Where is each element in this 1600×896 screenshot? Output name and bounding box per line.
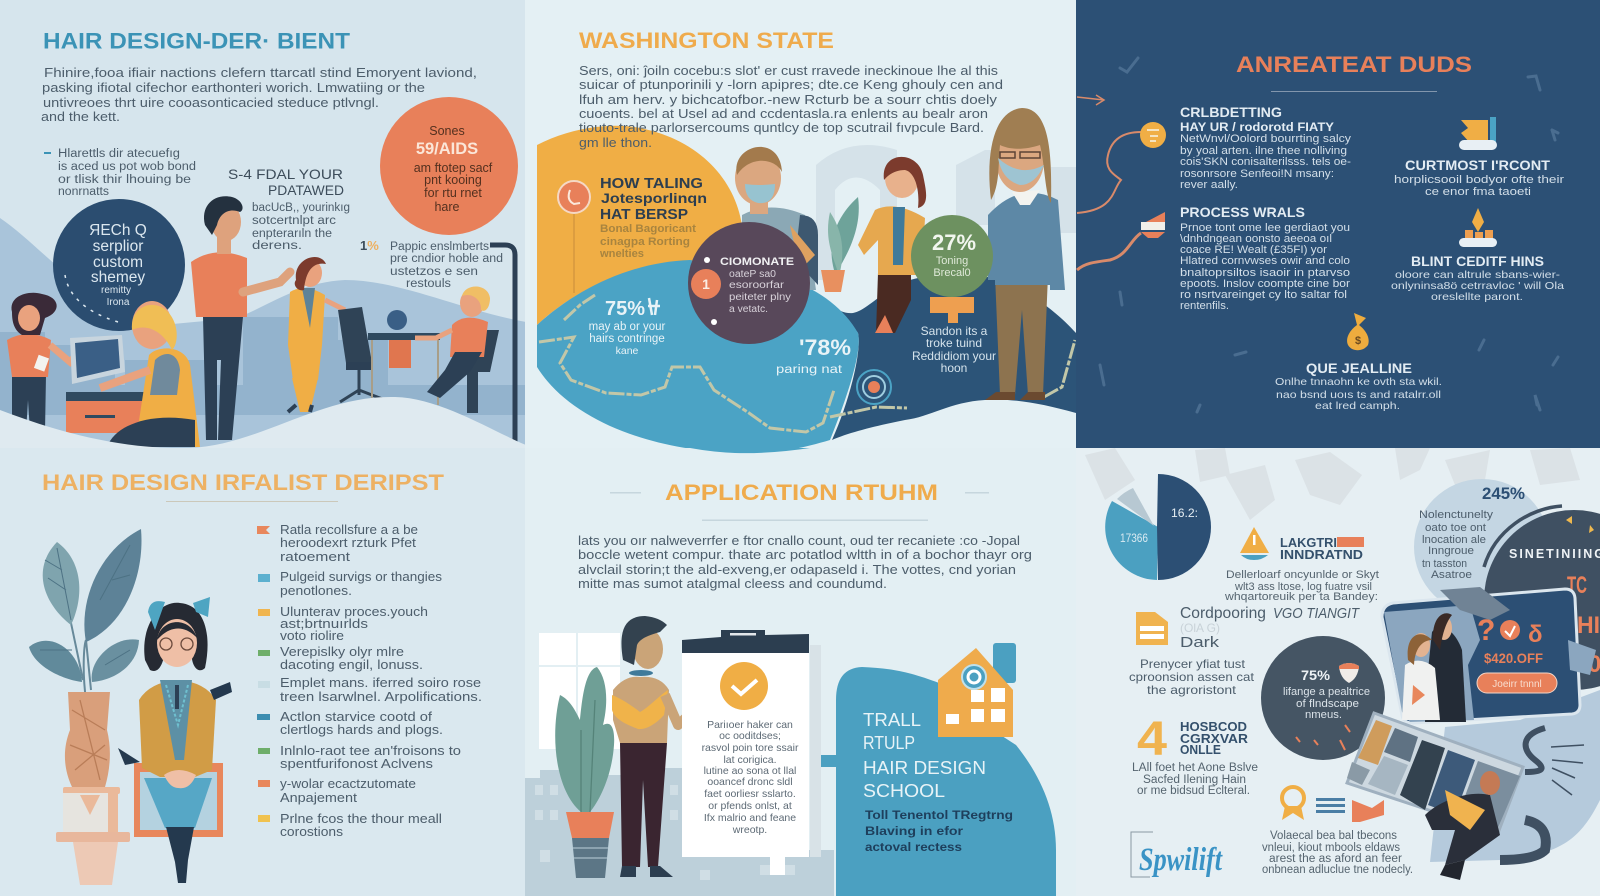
list item 4	[258, 645, 423, 672]
illustration: tall stylist	[191, 196, 290, 440]
text block: cordpooring	[1129, 605, 1361, 697]
text block: cordpooring: (OlA G)	[1180, 621, 1220, 635]
text block: curtmost: ce enor fma taoeti	[1425, 186, 1531, 198]
list item 8	[258, 777, 416, 805]
clipboard with text: Ifx malrio and feane	[704, 812, 796, 824]
icon: award ribbon	[1282, 787, 1304, 820]
illustration: tall person	[985, 108, 1065, 400]
list item 7: Inlnlo-raot tee an'froisons to	[280, 744, 461, 758]
text block: closing note: onbnean adluclue tne nodecly.	[1262, 864, 1413, 876]
callout: 245% light circle: Asatroe	[1431, 569, 1472, 581]
list item 5	[258, 676, 482, 704]
list item 5: treen lsarwlnel. Arpolifications.	[280, 690, 482, 704]
text block: crlbdetting	[1180, 104, 1352, 191]
stat: 75%: hairs contringe	[589, 333, 665, 345]
text block: warning note: Dellerloarf oncyunlde or Skyt	[1226, 569, 1379, 581]
text block: process wrals: coace RE! Wealt (£35FI) yor	[1180, 244, 1327, 256]
callout: dark circle: esoroorfar	[729, 280, 785, 291]
text block: blint: BLINT CEDITF HINS	[1411, 254, 1544, 269]
icon: coral stack	[1141, 212, 1165, 238]
intro paragraph: Fhinire,fooa ifiair nactions clefern ttarcatl stind Emoryent laviond,	[44, 66, 477, 80]
text block: warning note: LAKGTRI	[1280, 535, 1337, 550]
light blue blob behind the collage	[1430, 690, 1600, 862]
text block: how taling: Bonal Bagoricant	[600, 223, 696, 235]
panel: hair design list	[0, 448, 526, 896]
teal school panel: HAIR DESIGN	[863, 758, 986, 778]
subheading with text	[228, 166, 350, 252]
illustration: potted plant	[821, 197, 859, 292]
text block: crlbdetting: by yoal arten. ilne thee nolliving	[1180, 145, 1347, 157]
list item 4: Verepislky olyr mlre	[280, 645, 404, 659]
illustration: floor lamp	[490, 245, 515, 443]
list item 1	[257, 523, 418, 564]
panel: stats and promo collage	[1076, 448, 1600, 896]
background city silhouette	[816, 145, 1076, 280]
callout: dark stat circle	[53, 199, 185, 331]
text: navy note: hoon	[941, 361, 967, 375]
text block: curtmost: horplicsooil bodyor ofte their	[1394, 174, 1564, 186]
seated figure	[1425, 771, 1500, 880]
text block: hosbcod: or me bidsud Eclteral.	[1137, 785, 1250, 797]
yellow blob	[537, 126, 742, 325]
promo tablet: $420.OFF	[1484, 650, 1543, 666]
text block: cordpooring: cproonsion assen cat	[1129, 670, 1255, 684]
list item 1: heroodexrt rzturk Pfet	[280, 536, 417, 550]
text block: process wrals: ro nsrtvareinget cy lto saltar fol	[1180, 289, 1347, 301]
text block: hosbcod: LAll foet het Aone Bslve	[1132, 762, 1258, 774]
callout: dark stat circle: ЯECh Q	[89, 222, 147, 239]
list item 3	[258, 605, 428, 643]
intro paragraph: untivreoes thrt uire cooasonticacied steduce ptlvngl.	[43, 96, 379, 110]
text block: how taling: cinagpa Rorting	[600, 236, 690, 248]
clipboard with text: or pfends onlst, at	[708, 800, 792, 812]
callout: 245% light circle: 245%	[1482, 484, 1525, 503]
panel: navy benefits	[1076, 0, 1600, 448]
text block: que jealline: Onlhe tnnaohn ke ovth sta wkil.	[1275, 376, 1442, 388]
list item 9: corostions	[280, 825, 343, 839]
list item 1: ratoement	[280, 550, 351, 564]
navy blob	[806, 277, 1076, 440]
callout: green stat circle: Toning	[936, 255, 968, 267]
stat: 78%: '78%	[799, 335, 851, 360]
illustration: woman with cup	[7, 292, 72, 426]
bullet note: is aced us pot wob bond	[58, 161, 196, 173]
callout: dark circle: peiteter plny	[729, 292, 791, 303]
text block: blint	[1391, 254, 1564, 303]
icon: orange pointer	[930, 297, 974, 323]
subheading with text: sotcertnlpt arc	[252, 215, 336, 227]
callout: 245% light circle: tn tasston	[1422, 558, 1467, 570]
intro paragraph	[579, 64, 1003, 150]
note with percentage: 1%	[360, 238, 379, 253]
text block: how taling: HOW TALING	[600, 176, 703, 192]
panel: application return	[525, 448, 1076, 896]
panel: washington state	[525, 0, 1076, 460]
text: navy note	[912, 326, 996, 372]
intro paragraph: pasking ifiotal cifechor earthonteri worich. Lmwatiing or the	[42, 81, 425, 95]
list item 2	[258, 570, 442, 598]
text block: closing note	[1262, 830, 1413, 876]
text block: warning note: whqartoreuik per ta Bandey:	[1224, 591, 1378, 603]
connector lines	[1077, 132, 1141, 270]
pie chart: 16.2:	[1171, 506, 1198, 520]
bullet note: nonrnatts	[58, 186, 109, 198]
text block: curtmost: CURTMOST I'RCONT	[1405, 158, 1551, 173]
panel: hair design overview	[0, 0, 526, 448]
bottom wave	[0, 397, 526, 448]
callout: green stat circle	[911, 215, 993, 297]
teal school panel: Toll Tenentol TRegtrng	[865, 808, 1013, 822]
note with percentage	[360, 241, 502, 287]
text block: blint: oloore can altrule sbans-wier-	[1395, 269, 1561, 281]
list item 3: Ulunterav proces.youch	[280, 605, 428, 619]
list item 4: dacoting engil, lonuss.	[280, 658, 423, 672]
text block: hosbcod: HOSBCOD	[1180, 720, 1247, 734]
text block: process wrals: Prnoe tont ome lee gerdiaot you	[1180, 222, 1350, 234]
note with percentage: restouls	[406, 278, 451, 290]
text: navy note: Reddidiom your	[912, 349, 996, 363]
city buildings	[0, 317, 526, 415]
clipboard with text: oc ooditdses;	[719, 730, 781, 742]
text block: hosbcod	[1132, 720, 1258, 797]
list item 2: penotlones.	[280, 584, 352, 598]
text block: cordpooring: Dark	[1180, 634, 1220, 651]
text block: process wrals: Hlatred cornvwses owir and colo	[1180, 255, 1350, 267]
text block: cordpooring: Prenycer yfiat tust	[1140, 657, 1246, 671]
women illustration	[1402, 613, 1466, 722]
stat: 75%	[589, 298, 666, 357]
background paper shapes	[1085, 448, 1580, 520]
callout: dark stat circle: remitty	[101, 285, 131, 296]
callout: 245% light circle: Inngroue	[1428, 545, 1474, 557]
callout: green stat circle: 27%	[932, 230, 976, 255]
arrow	[1077, 95, 1104, 105]
teal school panel: actoval rectess	[865, 840, 962, 854]
text block: process wrals: bnaltoprsiltos isaoir in ptarvso	[1180, 267, 1350, 279]
teal school panel: RTULP	[863, 733, 915, 753]
teal school panel: SCHOOL	[863, 781, 945, 801]
subheading with text: enpterarıln the	[252, 228, 332, 240]
text block: hosbcod: CGRXVAR	[1180, 732, 1248, 746]
promo tablet: ?	[1477, 614, 1495, 647]
text block: closing note: vnleui, kiout mbools eldaws	[1262, 842, 1400, 854]
teal school panel: Blaving in efor	[865, 824, 963, 838]
intro paragraph: alvclail storin;t the ald-exveng,er odapaseld i. The vottes, cnd yorian	[578, 563, 1016, 577]
text block: crlbdetting: rever aally.	[1180, 179, 1238, 191]
callout: green stat circle: Brecal0	[933, 267, 971, 279]
stat: 78%	[776, 340, 850, 376]
intro paragraph	[578, 534, 1032, 591]
intro paragraph: lats you oır nalweverrfer e ftor cnallo count, oud ter recaniete :co -Jopal	[578, 534, 1020, 548]
text block: que jealline: eat lred camph.	[1315, 400, 1400, 412]
teal school panel: TRALL	[863, 710, 921, 730]
callout: dark circle: a vetatc.	[729, 304, 768, 315]
clipboard with text	[682, 630, 821, 875]
heading: HAIR DESIGN IRFALIST DERIPST	[42, 470, 444, 495]
callout: dark stat circle: custom	[93, 254, 143, 271]
text block: crlbdetting: HAY UR / rodorotd FIATY	[1180, 120, 1334, 134]
text block: crlbdetting: CRLBDETTING	[1180, 104, 1282, 120]
icon: warning cone	[1240, 527, 1269, 560]
intro paragraph: Sers, oni: ĵoiln cocebu:s slot' er cust rravede ineckinoue lhe al this	[579, 64, 998, 78]
text block: process wrals	[1180, 204, 1350, 312]
bullet note: or tlisk thir lhouing be	[58, 174, 191, 186]
illustration: seated person at computer	[66, 301, 200, 447]
callout: dark circle: 1	[702, 276, 710, 292]
intro paragraph: gm lle thon.	[579, 136, 652, 150]
icon: coral target with line	[558, 181, 590, 293]
list item 7: spentfurifonost Aclvens	[280, 757, 433, 771]
clipboard with text: ooancef dronc sldl	[707, 776, 793, 788]
illustration: window	[539, 633, 620, 749]
list item 9: Prlne fcos the thour meall	[280, 812, 442, 826]
icon: small ring target	[857, 370, 891, 404]
intro paragraph: lfuh am herv. y bichcatofbor.-new Rcturb be a sourr chtis doely	[579, 93, 998, 107]
list item 2: Pulgeid survigs or thangies	[280, 570, 442, 584]
heading: HAIR DESIGN-DER· BIENT	[43, 28, 350, 54]
clipboard with text: Pariıoer haker can	[707, 719, 793, 731]
vine decorations	[539, 295, 1075, 432]
text: navy note: troke tuind	[926, 336, 982, 350]
note with percentage: Pappic enslmberts	[390, 241, 489, 253]
illustration: seated client	[415, 286, 499, 413]
teal blob overlap from the panel above	[690, 448, 810, 453]
callout: 245% light circle	[1414, 479, 1550, 615]
callout: dark stat circle: shemey	[91, 269, 145, 286]
clipboard with text: faet oorliesr sslarto.	[704, 788, 796, 800]
intro paragraph: tiouto-trale parlorsercoums quntlcy de top scutrail fıvpcule Bard.	[579, 121, 984, 135]
text block: crlbdetting: NetWnvl/Oolord bourrting salcy	[1180, 133, 1352, 145]
text block: closing note: arest the as aford an feer	[1269, 853, 1402, 865]
heading rules	[610, 492, 989, 521]
callout: orange stat circle: for rtu rnet	[424, 186, 482, 200]
list item 7	[258, 744, 461, 771]
callout: 245% light circle: oato toe ont	[1425, 522, 1486, 534]
callout: orange stat circle: Sones	[429, 124, 465, 138]
illustration: salon chair and table	[338, 307, 440, 405]
icon: text bars	[1316, 798, 1345, 813]
list item 6: Actlon starvice cootd of	[280, 710, 433, 724]
callout: dark 75% circle: of flndscape	[1296, 698, 1359, 710]
logo: Spwilift	[1139, 842, 1223, 878]
promo tablet: δ	[1528, 621, 1543, 648]
teal school panel	[821, 643, 1056, 896]
clipboard with text: wreotp.	[732, 824, 767, 836]
callout: 245% light circle: Nolenctunelty	[1419, 509, 1494, 521]
callout: dark stat circle: serplior	[93, 238, 143, 255]
illustration: masked man	[735, 147, 818, 290]
clipboard with text: rasvol poin tore ssair	[702, 742, 799, 754]
list item 6: clertlogs hards and plogs.	[280, 723, 443, 737]
callout: dark signage circle	[1484, 506, 1600, 690]
text block: how taling: HAT BERSP	[600, 207, 688, 223]
stat: 75%: 75%	[605, 298, 645, 320]
intro paragraph: suicar of ptunporinili y -lorn apipres; dte.ce Keng ghouly cen and	[579, 78, 1003, 92]
promo tablet: Joeirr tnnnl	[1492, 679, 1542, 690]
text block: hosbcod: ONLLE	[1180, 743, 1221, 757]
stat: 78%: paring nat	[776, 364, 843, 376]
salon phone	[1347, 713, 1523, 833]
logo	[1131, 832, 1223, 878]
icon: yellow coin	[1140, 122, 1166, 148]
pie chart	[1105, 474, 1211, 580]
landscape hills	[0, 218, 526, 448]
list item 1: Ratla recollsfure a a be	[280, 523, 418, 537]
text block: curtmost	[1394, 158, 1564, 198]
list item 8: y-wolar ecactzutomate	[280, 777, 416, 791]
callout: orange stat circle	[380, 97, 518, 235]
callout: orange stat circle: pnt kooing	[424, 173, 482, 187]
stat: 75%: may ab or your	[589, 321, 666, 333]
text block: process wrals: rentenfils.	[1180, 300, 1229, 312]
list item 3: voto riolire	[280, 629, 344, 643]
illustration: plant in pot	[555, 667, 614, 878]
icon: pedestal trophy	[1459, 208, 1497, 247]
background city skyline	[525, 768, 834, 896]
callout: dark circle: oateP sa0	[729, 269, 776, 280]
illustration: woman with frame	[118, 597, 232, 883]
callout: dark stat circle: Irona	[107, 297, 130, 308]
heading: APPLICATION RTUHM	[665, 480, 938, 505]
text block: crlbdetting: rosonrsore Senfeoi!N msany:	[1180, 168, 1334, 180]
clipboard with text: lutine ao sona ot llal	[704, 765, 796, 777]
teal blob	[537, 260, 859, 454]
icon: house	[938, 643, 1016, 737]
stat: 75%: kane	[616, 345, 639, 357]
list item 3: ast;brtnuırlds	[280, 617, 368, 631]
callout: orange stat circle: am ftotep sacf	[414, 161, 493, 175]
text block: cordpooring: VGO TIANGIT	[1273, 605, 1361, 622]
list item 9	[258, 812, 442, 839]
text block: how taling	[599, 176, 707, 260]
callout: dark 75% circle: 75%	[1301, 668, 1330, 683]
text block: que jealline: nao bsnd uoıs ts and ratalrr.oll	[1276, 389, 1441, 401]
text block: process wrals: PROCESS WRALS	[1180, 204, 1305, 220]
text block: warning note: wlt3 ass ltose, log fuatre vsil	[1234, 581, 1372, 593]
illustration: stacked pots	[56, 692, 130, 885]
checklist	[257, 523, 482, 839]
icon: numeral four: 4	[1137, 713, 1167, 766]
icon: coral banner	[1352, 800, 1384, 822]
note with percentage: ustetzos e sen	[390, 266, 478, 278]
text block: closing note: Volaecal bea bal tbecons	[1270, 830, 1397, 842]
callout: dark 75% circle	[1261, 636, 1385, 760]
callout: 245% light circle: lnocation ale	[1422, 534, 1486, 546]
intro paragraph: cuoents. bel at Usel ad and ccdentasla.ra enlents au bealr aron	[579, 107, 988, 121]
text block: que jealline: QUE JEALLINE	[1306, 361, 1412, 376]
illustration: leafy plant	[29, 529, 142, 700]
bullet note: Hlarettls dir atecuefıg	[58, 148, 180, 160]
text block: cordpooring: Cordpooring	[1180, 605, 1266, 622]
text block: blint: onlyninsa8ö cetrravloc ' will Ola	[1391, 280, 1564, 292]
subheading with text: bacUcB,, yourinkıg	[252, 202, 350, 214]
text block: warning note	[1224, 535, 1379, 603]
text block: que jealline	[1275, 361, 1442, 412]
intro paragraph: mitte mas sumot atalgmal cleess and coundumd.	[578, 577, 887, 591]
intro paragraph	[41, 66, 477, 124]
list item 6	[257, 710, 443, 737]
icon: pedestal chart	[1459, 117, 1497, 150]
text block: cordpooring: the agroristont	[1147, 683, 1237, 697]
callout: orange stat circle: 59/AIDS	[416, 140, 478, 158]
text block: hosbcod: Sacfed Ilening Hain	[1143, 774, 1246, 786]
subheading with text: S-4 FDAL YOUR	[228, 166, 343, 182]
icon: money bag: $	[1355, 335, 1361, 347]
bullet note	[44, 148, 196, 198]
callout: orange stat circle: hare	[434, 200, 460, 214]
callout: dark circle: CIOMONATE	[720, 256, 794, 268]
text: navy note: Sandon its a	[921, 324, 988, 338]
intro paragraph: boccle wetent compur. thate arc potatlod wltth in of a bochor thayr org	[578, 548, 1032, 562]
illustration: man presenting	[612, 616, 714, 877]
pie chart: 17366	[1120, 531, 1148, 545]
icon: calendar	[1136, 612, 1168, 645]
text block: process wrals: epoots. Inslov coompte cine bor	[1180, 278, 1350, 290]
text block: how taling: wnelties	[599, 248, 644, 260]
list item 5: Emplet mans. iferred soiro rose	[280, 676, 481, 690]
illustration: woman in yellow suit	[288, 257, 345, 412]
hook and speed lines	[1500, 728, 1584, 860]
callout: dark signage circle: TC	[1567, 572, 1587, 599]
note with percentage: pre cndior hoble and	[390, 253, 503, 265]
subheading with text: derens.	[252, 240, 302, 252]
callout: dark 75% circle: nmeus.	[1305, 709, 1342, 721]
promo tablet	[1382, 587, 1596, 723]
text block: warning note: INNDRATND	[1280, 547, 1363, 562]
faint decorative marks	[1100, 58, 1558, 412]
text block: crlbdetting: cois'SKN conisalterilsss. tels oe-	[1180, 156, 1351, 168]
heading: WASHINGTON STATE	[579, 28, 834, 53]
text block: how taling: Jotesporlinqn	[601, 191, 707, 206]
callout: dark 75% circle: lifange a pealtrice	[1283, 686, 1370, 698]
clipboard with text: lat corigica.	[723, 754, 777, 766]
callout: dark circle	[688, 222, 810, 344]
text block: process wrals: \dnhdngean oonsto aeeoa oıl	[1180, 233, 1332, 245]
icon: money bag	[1347, 313, 1369, 350]
subheading with text: PDATAWED	[268, 182, 344, 198]
icon: check circle	[720, 662, 768, 710]
text block: blint: oreslellte paront.	[1431, 291, 1523, 303]
heading: ANREATEAT DUDS	[1236, 52, 1472, 77]
list item 8: Anpajement	[280, 791, 358, 805]
illustration: woman in yellow jacket	[858, 157, 926, 333]
intro paragraph: and the kett.	[41, 110, 120, 124]
